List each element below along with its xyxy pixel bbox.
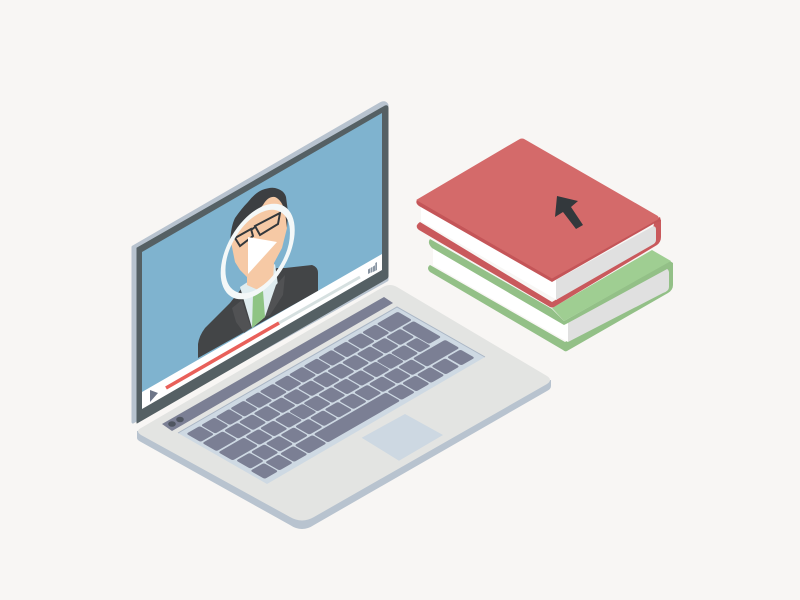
keyboard well [178,307,485,484]
presenter hair [230,188,288,250]
laptop base [137,285,551,529]
progress track [279,277,360,323]
laptop lid [133,103,388,423]
green book [428,239,673,351]
book stack [416,139,673,351]
control bar background [142,254,382,409]
presenter lapels [232,275,285,333]
red cover [417,139,658,278]
red lower cover [417,218,661,308]
presenter face [231,197,287,290]
screen background [142,113,382,393]
progress fill [166,323,279,388]
red book pages side [556,226,656,300]
green front cover [552,250,671,321]
arrow icon [555,196,583,229]
laptop [133,103,551,529]
red book pages front [421,206,557,300]
trackpad [362,414,443,461]
lid back edge [133,103,387,422]
video control bar [142,254,382,409]
presenter shirt [240,264,278,328]
green book pages front [433,248,568,342]
play ring [223,192,292,312]
green spine edge [429,239,673,325]
speaker bar [162,297,393,431]
keyboard keys [186,312,476,479]
lid frame [137,106,388,423]
red spine edge [416,200,661,282]
volume bars icon [368,262,377,274]
play triangle [248,237,277,274]
green book pages side [568,268,669,342]
green back cover [428,262,673,351]
small play icon [150,390,158,402]
presenter glasses [235,213,280,246]
presenter tie [252,291,265,328]
video presenter [198,188,318,358]
presenter suit [198,265,318,358]
red book [416,139,661,308]
